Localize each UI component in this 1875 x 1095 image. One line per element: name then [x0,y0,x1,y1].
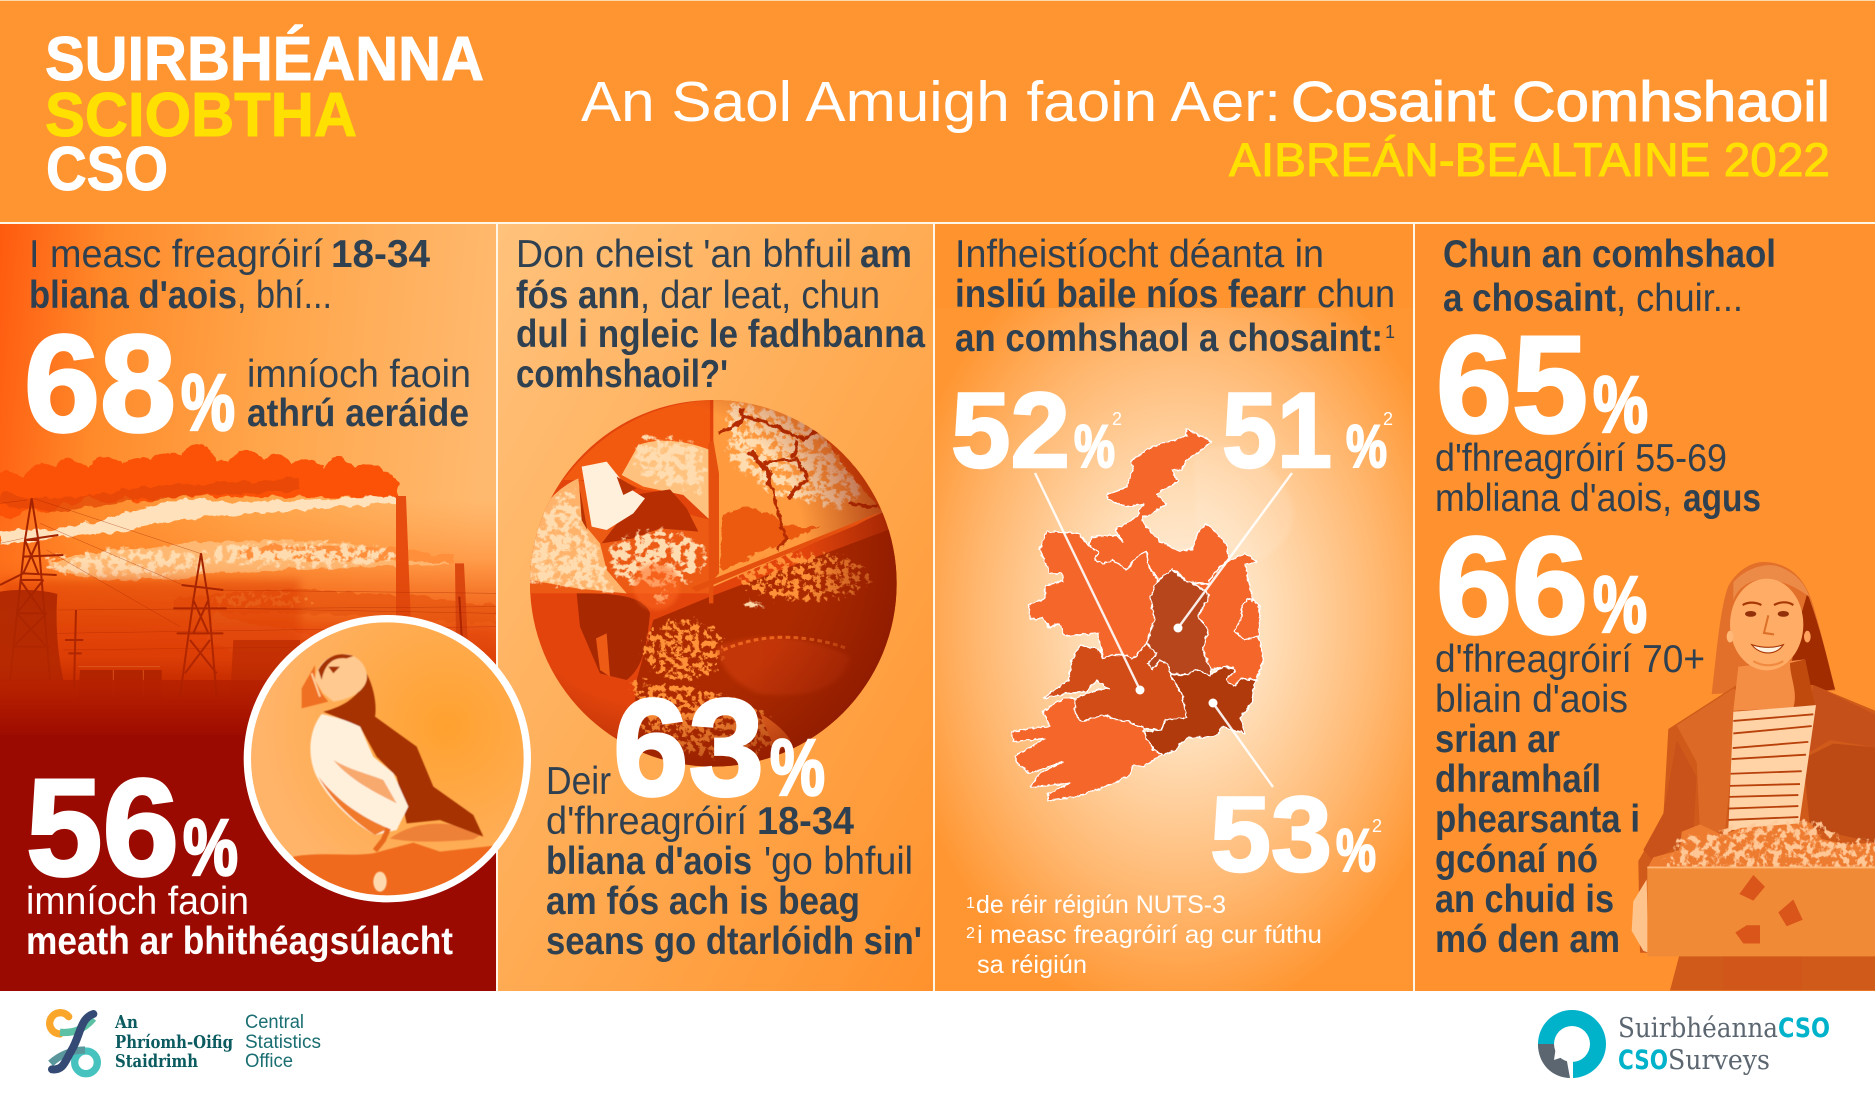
panel: home insulation map [935,224,1413,991]
statistic: 51%: 2 [1383,409,1393,429]
plastic bottles [1648,823,1875,868]
footer logo: CSO Surveys [1538,1010,1830,1078]
question text: am [860,233,912,276]
heading text: an comhshaol a chosaint: [955,317,1383,360]
map of Ireland by NUTS-3 region [1012,429,1293,800]
wordmark: Irish: Staidrimh [115,1051,198,1072]
heading text: insliú baile níos fearr [955,273,1306,316]
icon: speech ring [1538,1010,1606,1078]
title: Suirbhéanna Sciobtha CSO: SUIRBHÉANNA [45,25,484,94]
statistic: 52%: % [1074,413,1115,480]
wordmark: English [245,1012,321,1072]
hair [1712,562,1836,694]
heading text: chun [1317,273,1395,316]
cardboard box [1647,867,1875,956]
intro text: , chuir... [1616,277,1743,320]
description text: 18-34 [757,800,854,843]
text: ages 70+: d'fhreagróirí 70+ [1435,638,1705,681]
leg [375,828,388,851]
intro text: , bhí... [237,274,332,317]
heading text: 1 [1385,322,1395,342]
region: Dublin [1234,598,1260,640]
left side dark haze [0,574,303,652]
footnotes: i measc freagróirí ag cur fúthu [977,921,1322,949]
chimneys [396,496,411,617]
text: ages 55-69: mbliana d'aois, [1435,477,1672,520]
statistic: 66%: 66 [1436,509,1588,663]
wordmark: CSO [1778,1013,1830,1044]
statistic: 56%: 56 [26,751,179,905]
description text: seans go dtarlóidh sin' [546,920,922,963]
panel: changing behaviour [1415,224,1875,991]
title: Suirbhéanna Sciobtha CSO: CSO [46,135,168,204]
rock [292,842,494,896]
leader lines [1035,473,1292,787]
illustration: earth as pie chart [523,393,900,770]
question text: Don cheist 'an bhfuil [516,233,852,276]
intro text: 18-34 [331,233,430,276]
heading: survey topic: Cosaint Comhshaoil [1291,70,1830,134]
pale underside of the smoke [0,495,397,543]
hand [1632,880,1648,952]
Africa and ocean clouds [530,478,627,593]
text: ages 70+: an chuid is [1435,878,1614,921]
mottled highlights in clouds [44,545,212,580]
statistic: 63%: 63 [613,671,764,825]
heading text [955,233,1395,360]
vertical fade to dark red [0,560,496,741]
middle cloud band [50,540,450,579]
statistic: 51%: % [1346,413,1387,480]
wordmark: English: Central [245,1012,304,1033]
description text: d'fhreagróirí [546,800,747,843]
panel: young people's worries [0,224,496,991]
below-box shirt [1723,956,1802,990]
statistic: 53%: 53 [1210,774,1332,894]
statistic: 56%: % [183,803,238,892]
statistic: 52%: 2 [1112,409,1122,429]
main smoke plume [0,446,398,518]
intro text: Chun an comhshaol [1443,233,1776,276]
region: West [1028,532,1158,658]
wordmark: Surveys [1668,1045,1770,1076]
jacket [1638,685,1875,990]
panel dividers [0,222,1875,991]
statistic: 51% [1222,370,1393,490]
label: climate change: athrú aeráide [247,392,469,435]
recycling symbol [1739,875,1765,901]
wordmark: CSO [1618,1045,1668,1076]
ground [0,680,256,703]
region: South-East [1143,667,1255,755]
footnotes [966,891,1322,979]
description text: 'go bhfuil [764,840,913,883]
intro text: bliana d'aois [29,274,237,317]
wedge: cracked earth [713,397,885,587]
text: ages 55-69 [1435,437,1761,520]
footnotes: 2 [966,925,975,942]
arm shade [1644,788,1696,858]
label: biodiversity [26,880,453,963]
wordmark: English: Statistics [245,1032,321,1053]
text: ages 70+: phearsanta i [1435,798,1640,841]
question text [516,233,925,396]
statistic: 53%: 2 [1372,816,1382,836]
pylons and wires [0,498,496,697]
region: Mid-West [1043,643,1187,730]
wordmark: English: Office [245,1051,293,1072]
text: ages 70+: mó den am [1435,918,1620,961]
wordmark: Irish: Phríomh-Oifig [115,1032,233,1053]
statistic: 53% [1210,774,1382,894]
footer logo: Central Statistics Office [50,1012,321,1074]
footnotes: sa réigiún [977,951,1087,979]
text: ages 55-69: d'fhreagróirí 55-69 [1435,437,1727,480]
question text: dul i ngleic le fadhbanna [516,313,925,356]
neck [1733,659,1815,711]
label: biodiversity: meath ar bhithéagsúlacht [26,920,453,963]
label: climate change: imníoch faoin [247,353,471,396]
question text: , dar leat, chun [640,274,880,317]
lower cloud band [173,590,495,623]
statistic: 65%: 65 [1436,308,1588,462]
footnotes: 1 [966,895,975,912]
statistic: 68%: 68 [24,307,176,461]
title: Suirbhéanna Sciobtha CSO: SCIOBTHA [45,81,357,150]
pie slice edges [708,440,719,603]
cooling tower [0,590,63,682]
wordmark [1618,1013,1830,1076]
intro text [29,233,430,317]
region: Midlands [1147,569,1212,675]
region: Mid-East [1193,553,1263,687]
heading: survey topic [581,70,1830,134]
text: ages 70+ [1435,638,1705,961]
header band [0,0,1875,222]
text: ages 70+: gcónaí nó [1435,838,1598,881]
label: biodiversity: imníoch faoin [26,880,249,923]
intro text: I measc freagróirí [29,233,323,276]
footnotes: de réir réigiún NUTS-3 [976,891,1226,919]
sphere shading [567,400,896,766]
question text: fós ann [516,274,640,317]
wing and neck [323,673,483,837]
statistic: 53%: % [1336,817,1376,884]
lower left base under clouds [527,480,710,593]
description text: am fós ach is beag [546,880,860,923]
wordmark: Irish: An [114,1012,138,1033]
panel: is there still time [498,224,933,991]
illustration: power station at sunset [0,446,496,737]
upper Asia [564,400,710,491]
description text: bliana d'aois [546,840,752,883]
photo: puffin in circle [247,619,527,907]
statistic: 63%: % [770,723,825,812]
tail [390,824,483,842]
beak [302,665,328,708]
striped top [1728,705,1816,830]
face [1730,579,1803,670]
Arabia [582,462,645,530]
statistic: 52%: 52 [951,370,1070,490]
statistic: 52% [951,370,1122,490]
dark southern ocean [577,593,650,680]
heading text: Infheistíocht déanta in [955,233,1324,276]
wordmark: Irish [114,1012,233,1072]
text: ages 70+: dhramhaíl [1435,758,1601,801]
description text [546,800,922,963]
region: South-West [1012,698,1162,800]
title: Suirbhéanna Sciobtha CSO [45,25,484,204]
text: ages 70+: srian ar [1435,718,1560,761]
statistic: 66%: % [1593,560,1647,649]
statistic: 68%: % [181,358,235,447]
head [315,654,367,702]
intro text [1443,233,1776,320]
Indian Ocean [602,489,698,543]
statistic: 63%: Deir [546,760,611,803]
label: climate change [247,353,471,435]
heading: survey topic: An Saol Amuigh faoin Aer: [581,70,1281,134]
heading: date: AIBREÁN-BEALTAINE 2022 [1229,133,1830,186]
wordmark: Suirbhéanna [1618,1013,1778,1044]
photo: woman holding recycling box [1632,562,1875,990]
icon: CSO knot [50,1013,97,1074]
statistic: 65%: % [1593,360,1648,449]
text: ages 70+: bliain d'aois [1435,678,1628,721]
question text: comhshaoil?' [516,353,728,396]
intro text: a chosaint [1443,277,1616,320]
region: Border [1088,429,1228,584]
statistic: 51%: 51 [1222,370,1332,490]
refinery buildings [232,640,300,680]
belly [310,714,408,835]
statistic: 63% [546,671,825,825]
text: ages 55-69: agus [1683,477,1761,520]
